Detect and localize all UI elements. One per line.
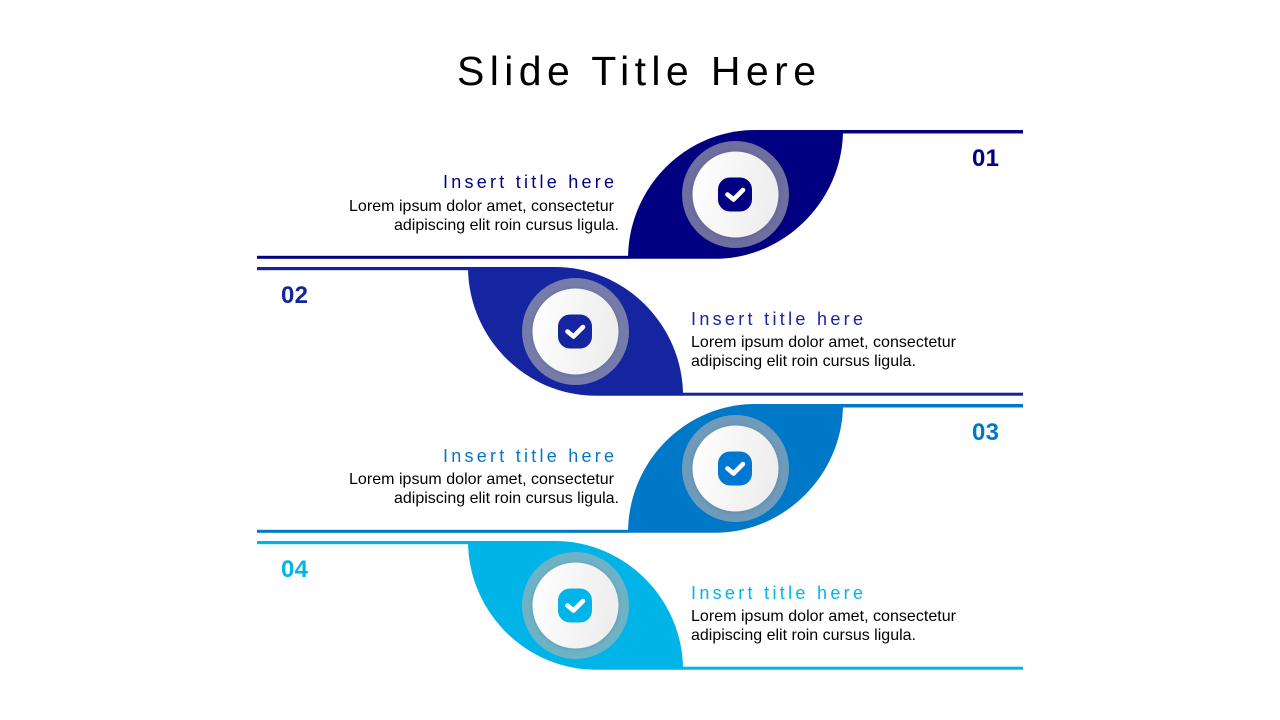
text block 01 bbox=[349, 198, 619, 234]
text block 03: adipiscing elit roin cursus ligula. bbox=[394, 490, 619, 507]
text block 02 bbox=[691, 334, 957, 370]
text block 03 bbox=[349, 471, 619, 507]
text block 02: adipiscing elit roin cursus ligula. bbox=[691, 353, 916, 370]
leaf shape 03 bbox=[628, 404, 843, 533]
connector lines 01 bbox=[257, 130, 1023, 259]
number 04: 04 bbox=[281, 556, 309, 583]
icon: check badge 03 bbox=[682, 415, 789, 522]
leaf shape 02 bbox=[468, 267, 683, 396]
icon: check badge 01 bbox=[682, 141, 789, 248]
title: Slide Title Here bbox=[457, 48, 816, 94]
text block 04: adipiscing elit roin cursus ligula. bbox=[691, 627, 916, 644]
number 01: 01 bbox=[972, 145, 999, 172]
leaf shape 04 bbox=[468, 541, 683, 670]
text block 02: Lorem ipsum dolor amet, consectetur bbox=[691, 334, 957, 351]
icon: check badge 04 bbox=[522, 552, 629, 659]
connector lines 03 bbox=[257, 404, 1023, 533]
text block 01: adipiscing elit roin cursus ligula. bbox=[394, 217, 619, 234]
number 03: 03 bbox=[972, 419, 999, 446]
panel: step 02 bbox=[257, 267, 1023, 396]
heading 04: Insert title here bbox=[691, 583, 863, 603]
panel: step 03 bbox=[257, 404, 1023, 533]
panel: step 01 bbox=[257, 130, 1023, 259]
number 02: 02 bbox=[281, 282, 308, 309]
text block 03: Lorem ipsum dolor amet, consectetur bbox=[349, 471, 615, 488]
connector lines 02 bbox=[257, 267, 1023, 396]
heading 02: Insert title here bbox=[691, 309, 863, 329]
panel: step 04 bbox=[257, 541, 1023, 670]
icon: check badge 02 bbox=[522, 278, 629, 385]
connector lines 04 bbox=[257, 541, 1023, 670]
heading 01: Insert title here bbox=[443, 172, 614, 192]
text block 04: Lorem ipsum dolor amet, consectetur bbox=[691, 608, 957, 625]
heading 03: Insert title here bbox=[443, 446, 614, 466]
leaf shape 01 bbox=[628, 130, 843, 259]
text block 04 bbox=[691, 608, 957, 644]
text block 01: Lorem ipsum dolor amet, consectetur bbox=[349, 198, 615, 215]
